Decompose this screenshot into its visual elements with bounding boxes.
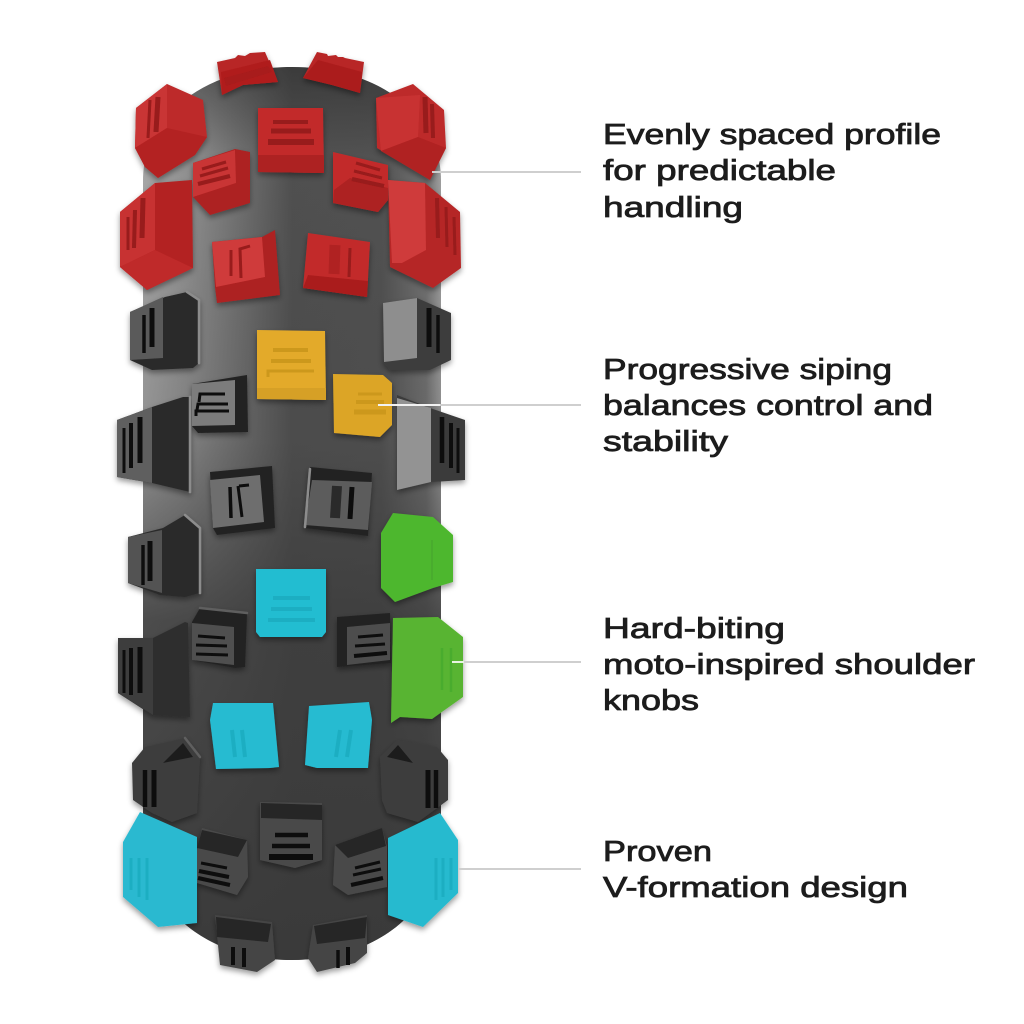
leader line <box>458 868 581 870</box>
dark knob: bottom right <box>308 915 367 972</box>
callout text <box>603 613 975 717</box>
callout text: Evenly spaced profile <box>603 119 941 151</box>
dark knob: right lower shoulder <box>380 740 448 822</box>
knob: red big upper right <box>376 84 446 180</box>
knob: cyan big left <box>123 812 197 927</box>
callout: progressive siping <box>378 354 933 458</box>
dark knob: row left <box>192 608 247 668</box>
knob: green upper <box>381 513 453 602</box>
callout text: for predictable <box>603 155 836 187</box>
dark knob: small left <box>192 375 248 433</box>
callout text <box>603 354 933 458</box>
callout text: Proven <box>603 836 712 868</box>
dark knob: row right <box>337 613 391 667</box>
knob: red small left <box>193 149 250 215</box>
tire body <box>143 67 441 960</box>
knob: red top right <box>303 52 364 93</box>
dark knob: bottom left <box>215 915 275 972</box>
knob: red lower right <box>303 233 370 297</box>
dark knob: upper right shoulder <box>383 298 451 370</box>
knob: yellow right <box>333 374 392 437</box>
callout: evenly spaced profile <box>432 119 941 224</box>
callout text: Progressive siping <box>603 354 892 386</box>
callout text: knobs <box>603 685 699 717</box>
dark knob: right wide shoulder <box>397 395 465 490</box>
knob: cyan lower right <box>305 702 372 768</box>
leader line <box>378 404 581 406</box>
knob: red big upper left <box>135 84 207 178</box>
leader line <box>432 171 581 173</box>
callout text: moto-inspired shoulder <box>603 649 975 681</box>
knob: red small right <box>333 152 388 212</box>
dark knob: left wide lower shoulder <box>118 622 190 717</box>
knob: cyan big right <box>388 813 458 927</box>
knob: red center top <box>258 108 324 173</box>
callout text: stability <box>603 426 729 458</box>
knob: yellow center <box>257 330 326 400</box>
callout: shoulder knobs <box>452 613 975 717</box>
dark knob: upper left shoulder <box>130 292 199 370</box>
dark knob: lower center <box>260 802 322 868</box>
knob: red big lower right <box>388 180 461 288</box>
callout text: handling <box>603 192 743 224</box>
dark knob: left wide shoulder <box>117 397 190 492</box>
knob: cyan lower left <box>210 703 279 769</box>
dark knob: center left <box>210 466 275 535</box>
callout text <box>603 119 941 224</box>
knob: red big lower left <box>120 180 193 290</box>
callout text: Hard-biting <box>603 613 785 645</box>
dark knob: lower right <box>333 828 387 895</box>
leader line <box>452 661 581 663</box>
dark knob: center right <box>305 467 372 536</box>
callout text: V-formation design <box>603 872 908 904</box>
dark knob: middle left shoulder <box>128 515 200 597</box>
knob: red top left <box>217 52 278 95</box>
knob: red lower left <box>212 230 280 303</box>
callout text: balances control and <box>603 390 933 422</box>
knob: green lower <box>391 617 463 723</box>
knobs <box>117 52 465 972</box>
dark knob: left lower shoulder <box>132 738 200 822</box>
tire illustration <box>117 52 465 972</box>
knob: cyan center <box>256 569 326 637</box>
dark knob: lower left <box>197 828 248 895</box>
callout: v-formation <box>458 836 908 904</box>
callout text <box>603 836 908 904</box>
